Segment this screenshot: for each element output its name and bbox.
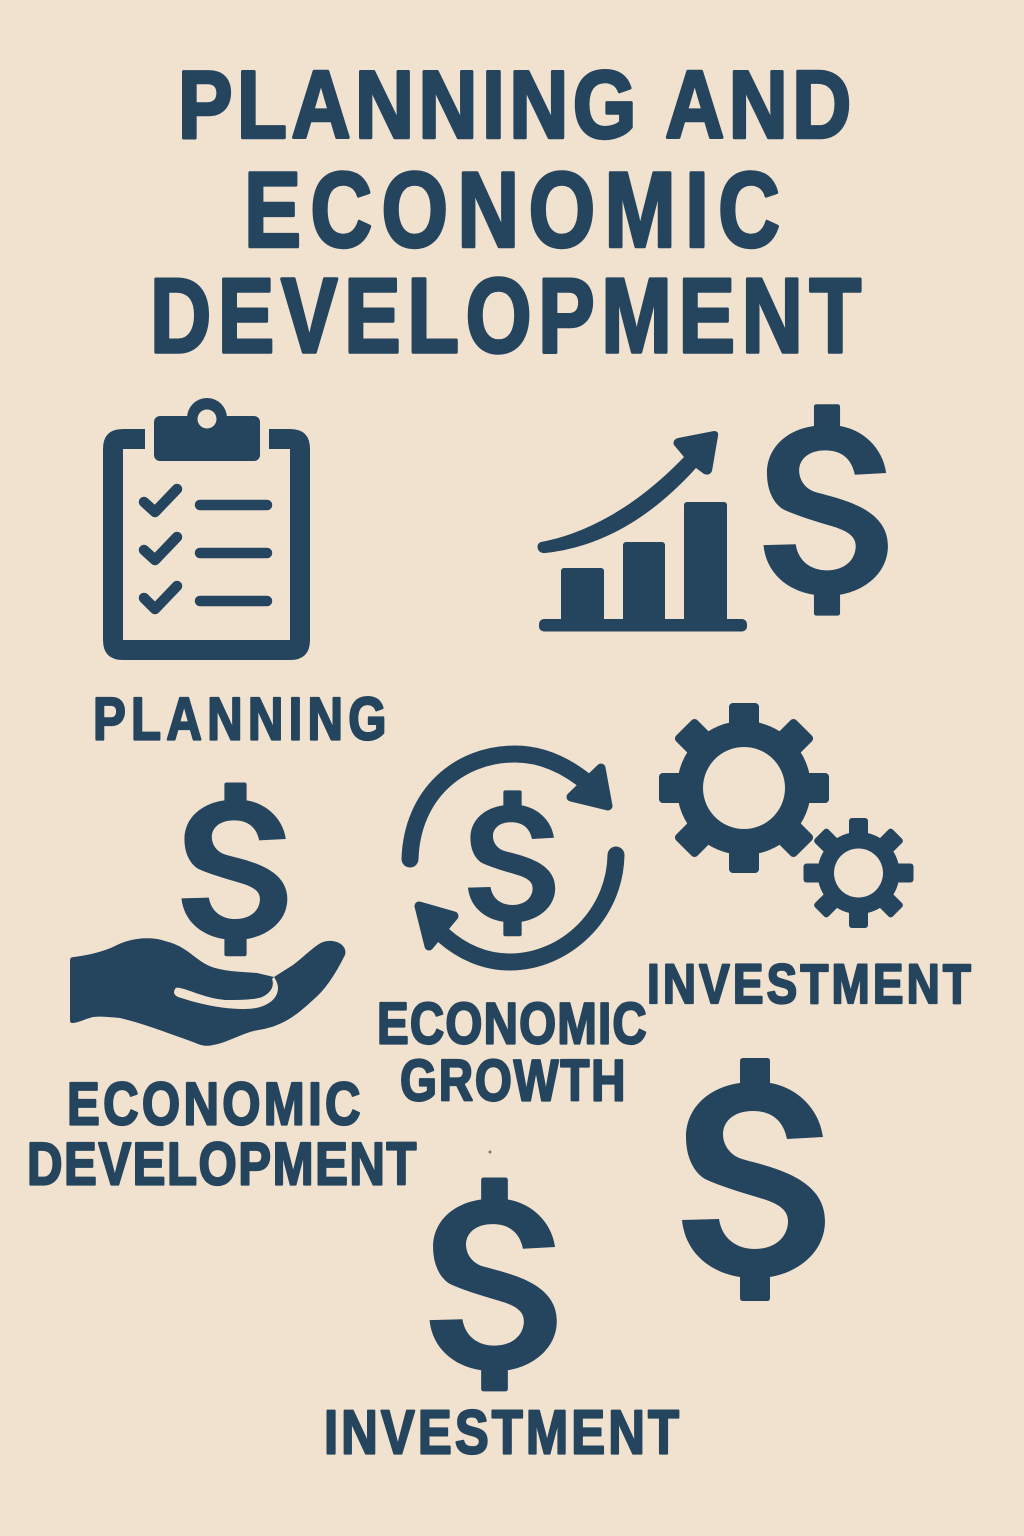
title: ECONOMIC [244, 149, 780, 270]
icon: large and small gears [659, 703, 914, 928]
icon: clipboard checklist [103, 398, 310, 660]
title: PLANNING AND [178, 50, 851, 158]
title: DEVELOPMENT [150, 257, 861, 375]
icon: dollar sign bottom [430, 1178, 557, 1391]
label: investment bottom: INVESTMENT [324, 1399, 679, 1468]
icon: dollar in circular arrows [410, 754, 616, 962]
label: economic development: DEVELOPMENT [27, 1130, 417, 1198]
label: economic growth [377, 992, 647, 1114]
icon: large dollar sign right [682, 1058, 825, 1301]
label: economic development: ECONOMIC [67, 1070, 361, 1138]
label: economic growth: GROWTH [400, 1049, 625, 1114]
label: economic growth: ECONOMIC [377, 992, 647, 1057]
icon: dollar sign beside chart [763, 404, 888, 616]
label: investment right: INVESTMENT [647, 953, 971, 1015]
label: planning: PLANNING [93, 685, 387, 753]
icon: growth bar chart with arrow [538, 431, 747, 632]
title [150, 50, 861, 375]
icon: dollar over open hand [70, 782, 345, 1046]
label: economic development [27, 1070, 417, 1198]
